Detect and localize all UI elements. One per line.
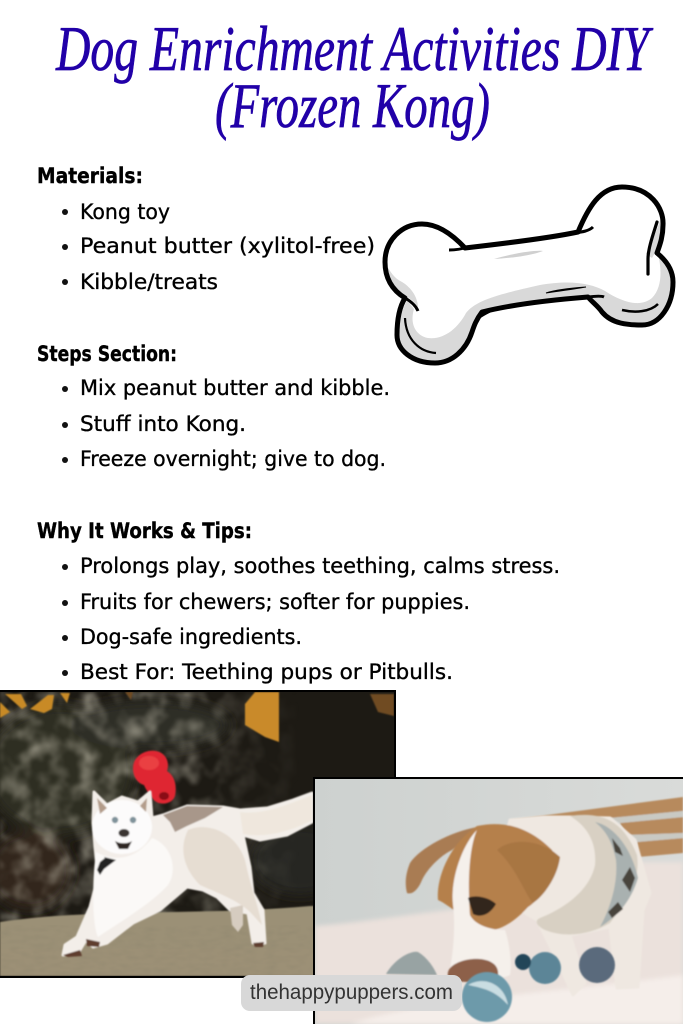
list: tips: Prolongs play, soothes teething, calms stress. — [80, 554, 560, 578]
photo: husky chasing red toy — [0, 690, 396, 978]
photo: dog in sweater with ornaments — [313, 777, 683, 1024]
list: tips — [62, 554, 560, 684]
heading: steps: Steps Section: — [37, 342, 177, 366]
list: materials — [62, 200, 375, 294]
heading: materials: Materials: — [37, 164, 143, 188]
blue ornaments — [386, 947, 615, 1022]
list: materials: Peanut butter (xylitol-free) — [80, 234, 375, 258]
list: tips: Dog-safe ingredients. — [80, 625, 302, 649]
list: steps: Freeze overnight; give to dog. — [80, 447, 386, 471]
husky dog — [63, 792, 312, 957]
icon: bone — [385, 187, 673, 363]
watermark: thehappypuppers.com: thehappypuppers.com — [250, 981, 453, 1004]
list: materials: Kibble/treats — [80, 270, 218, 294]
title: (Frozen Kong) — [215, 70, 490, 141]
list: materials: Kong toy — [80, 200, 170, 224]
list: steps: Mix peanut butter and kibble. — [80, 376, 390, 400]
list: steps — [62, 376, 390, 471]
icon: red kong toy — [133, 751, 176, 804]
section: why it works and tips — [37, 519, 560, 684]
list: tips: Fruits for chewers; softer for puppies. — [80, 590, 470, 614]
section: steps — [37, 342, 390, 471]
watermark: thehappypuppers.com — [241, 975, 462, 1011]
list: tips: Best For: Teething pups or Pitbulls. — [80, 660, 453, 684]
list: steps: Stuff into Kong. — [80, 412, 246, 436]
sweater dog — [406, 815, 650, 995]
title — [55, 13, 654, 141]
heading: why it works: Why It Works & Tips: — [37, 519, 252, 543]
dog ear left — [406, 827, 477, 893]
section: materials — [37, 164, 375, 294]
